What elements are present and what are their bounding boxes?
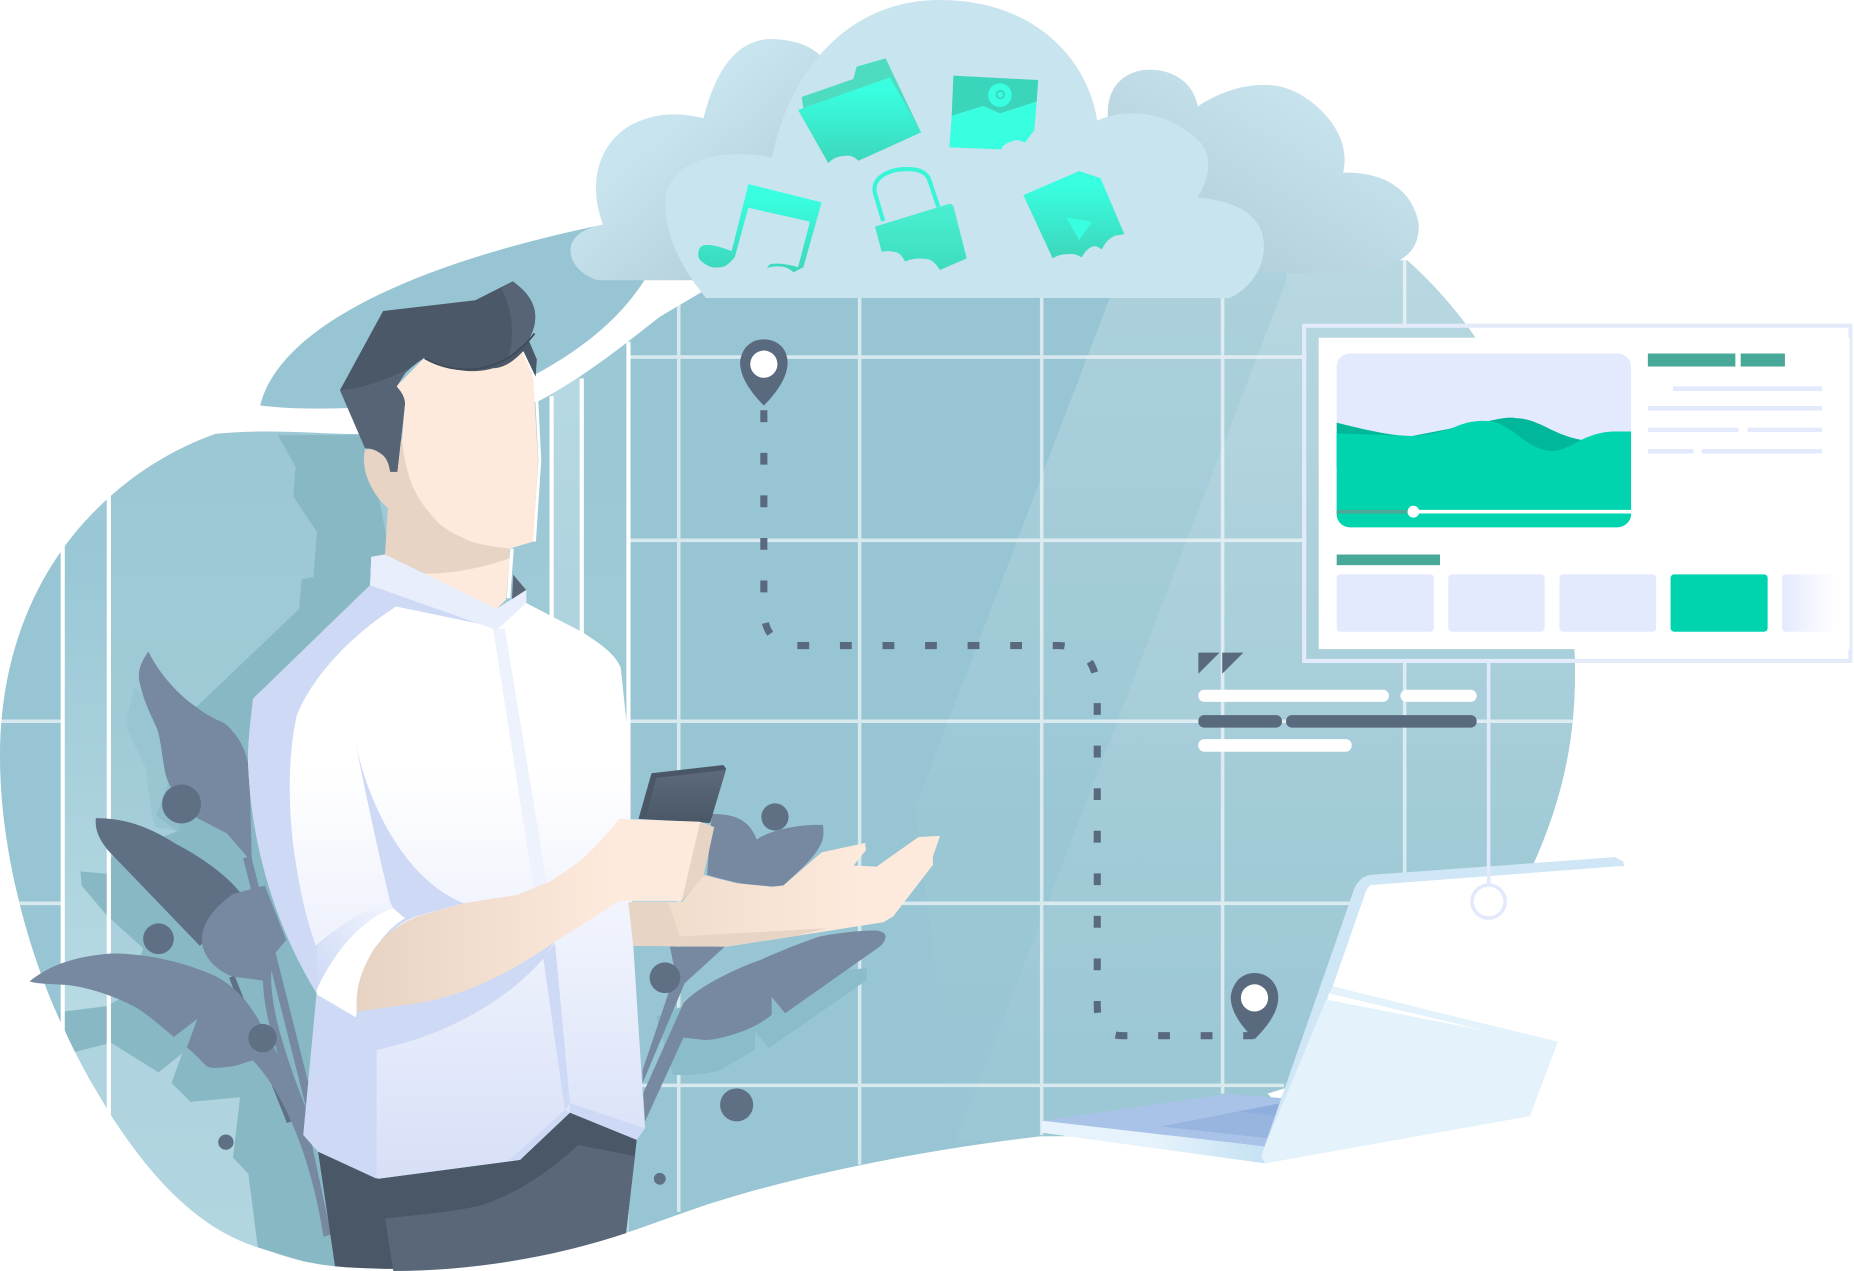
plants right: [643, 814, 886, 1122]
leaf behind hand: [707, 814, 823, 887]
laptop lid upper: [1333, 866, 1623, 1042]
laptop: [1042, 857, 1624, 1163]
laptop lid lower: [1261, 993, 1558, 1163]
background blob: [0, 225, 1584, 1271]
collar tag: [512, 575, 526, 599]
leaf bottom left: [30, 954, 261, 1068]
hair: [340, 281, 537, 472]
stems: [247, 857, 310, 1117]
dashboard panel: [1304, 326, 1850, 661]
lower neck: [420, 558, 510, 609]
keyboard: [1042, 1094, 1283, 1147]
floating text block: [1198, 653, 1477, 752]
shirt crease: [493, 629, 547, 893]
cloud: [570, 0, 1419, 298]
leaf round: [202, 886, 286, 981]
sleeve band: [317, 902, 393, 990]
phone: [639, 765, 726, 823]
cloud icon: image: [949, 76, 1038, 149]
collar: [370, 555, 526, 630]
grid lines: [1, 260, 1573, 1212]
right leaf lower: [643, 930, 886, 1122]
panel text lines: [1648, 386, 1822, 453]
shirt body: [248, 555, 645, 1179]
leaf top left: [139, 651, 253, 899]
wave chart: [1337, 354, 1631, 527]
plant berries: [143, 784, 789, 1185]
cloud icon: folder: [798, 58, 921, 163]
arm: [357, 819, 714, 1012]
leaf middle left dark: [96, 818, 241, 946]
ear and neck: [364, 440, 510, 574]
laptop base lip: [1042, 1121, 1265, 1163]
laptop lid frame: [1261, 857, 1624, 1163]
cloud icon: lock: [875, 169, 967, 270]
dotted route: [764, 410, 1253, 1036]
plants left: [30, 651, 331, 1237]
map pin bottom: [1231, 973, 1278, 1039]
sleeve white: [317, 908, 405, 1017]
trousers: [318, 1112, 637, 1271]
shirt shading: [248, 585, 645, 1179]
person: [248, 281, 940, 1271]
panel header bars: [1337, 354, 1785, 565]
face: [396, 351, 538, 549]
blob shadow shapes: [59, 435, 390, 1271]
map pin top: [740, 339, 788, 406]
right leaf upper: [643, 947, 725, 1083]
right leaf shadow: [656, 968, 867, 1075]
connector line and node: [1472, 661, 1505, 918]
white vertical bars: [63, 342, 628, 1117]
forearm open hand: [628, 836, 940, 947]
cloud icon: music note: [698, 184, 822, 272]
cloud icon: video: [1023, 171, 1124, 258]
panel tiles: [1337, 574, 1835, 632]
